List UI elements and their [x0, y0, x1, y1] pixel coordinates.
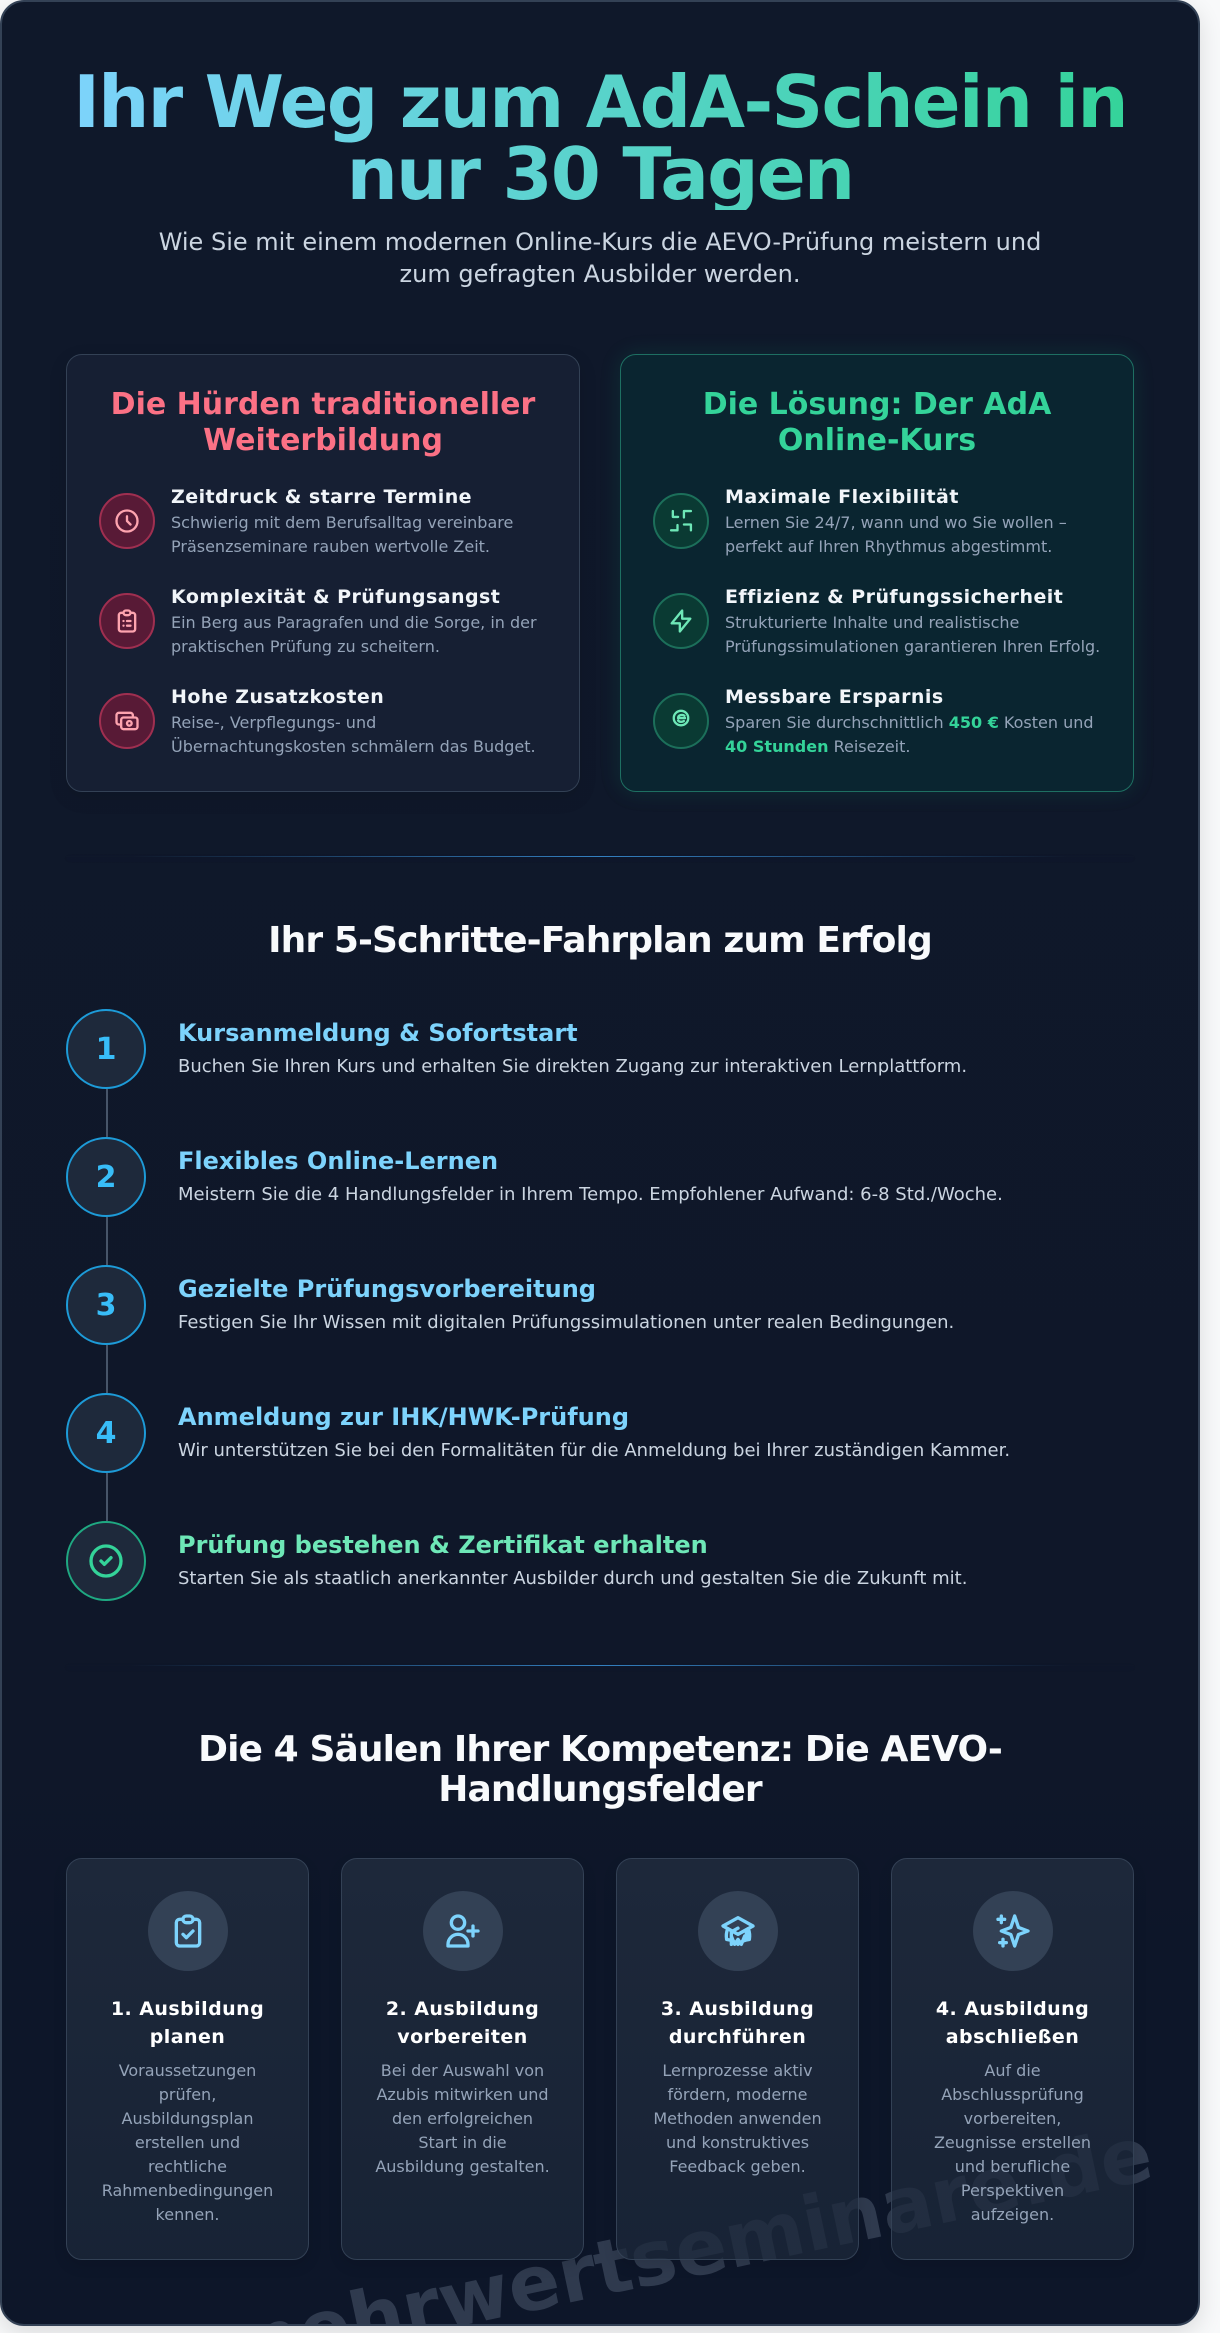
- connector 2: [106, 1217, 108, 1265]
- item: efficiency: [653, 586, 1100, 656]
- subtitle: Wie Sie mit einem modernen Online-Kurs die AEVO-Prüfung meistern und zum gefragten Ausbilder werden.: [159, 228, 1041, 288]
- comparison panels: [66, 352, 1136, 794]
- text: time pressure: Schwierig mit dem Berufsalltag vereinbare Präsenzseminare rauben wertvolle Zeit.: [171, 513, 513, 556]
- step 2: [66, 1137, 1003, 1265]
- step 2 text: Flexibles Online-Lernen: [178, 1147, 498, 1175]
- text: extra costs: Hohe Zusatzkosten: [171, 686, 384, 708]
- heading: competence pillars: Handlungsfelder: [438, 1769, 762, 1810]
- text: savings: Sparen Sie durchschnittlich 450 € Kosten und 40 Stunden Reisezeit.: [725, 713, 1094, 756]
- step 1 text: Kursanmeldung & Sofortstart: [178, 1019, 578, 1047]
- step number 2: [66, 1137, 146, 1217]
- icon: clock: [99, 493, 155, 549]
- item: complexity: [99, 586, 537, 656]
- card 1 title: 1. Ausbildung planen: [111, 1998, 264, 2048]
- text: efficiency: Strukturierte Inhalte und realistische Prüfungssimulationen garantieren Ihren Erfolg.: [725, 613, 1100, 656]
- title: [66, 66, 1134, 210]
- step number 2: 2: [96, 1160, 116, 1194]
- icon: clipboard list: [99, 593, 155, 649]
- card 4 title: 4. Ausbildung abschließen: [936, 1998, 1089, 2048]
- heading: competence pillars: [198, 1729, 1002, 1810]
- title: nur 30 Tagen: [347, 132, 853, 216]
- text: savings: Messbare Ersparnis: [725, 686, 944, 708]
- icon: check circle: [66, 1521, 146, 1601]
- step 4 text: [178, 1403, 1010, 1461]
- step 5 text: Prüfung bestehen & Zertifikat erhalten: [178, 1531, 708, 1559]
- text: complexity: Komplexität & Prüfungsangst: [171, 586, 500, 608]
- heading: hurdles: Die Hürden traditioneller Weiterbildung: [111, 387, 535, 458]
- item: flexibility: [653, 486, 1067, 556]
- step 3 text: [178, 1275, 954, 1333]
- step 4: [66, 1393, 1010, 1521]
- card 1: [66, 1858, 309, 2260]
- step 5: [66, 1521, 967, 1601]
- text: efficiency: Effizienz & Prüfungssicherheit: [725, 586, 1063, 608]
- step 1 text: [178, 1019, 967, 1077]
- pillar cards: [66, 1858, 1134, 2260]
- panel: hurdles: [66, 354, 580, 792]
- timeline: [66, 1009, 1010, 1601]
- panel: solution: [620, 354, 1134, 792]
- card 2 text: Bei der Auswahl von Azubis mitwirken und den erfolgreichen Start in die Ausbildung gestalten.: [375, 2061, 550, 2176]
- item: extra costs: [99, 686, 536, 756]
- icon: add user: [422, 1891, 502, 1971]
- text: time pressure: Zeitdruck & starre Termine: [171, 486, 472, 508]
- card 3 title: 3. Ausbildung durchführen: [661, 1998, 814, 2048]
- item: time pressure: [99, 486, 513, 556]
- icon: contract arrows: [653, 493, 709, 549]
- title: Ihr Weg zum AdA-Schein in: [73, 60, 1127, 144]
- step 2 text: [178, 1147, 1003, 1205]
- text: complexity: Ein Berg aus Paragrafen und die Sorge, in der praktischen Prüfung zu scheitern.: [171, 613, 537, 656]
- card 2 title: 2. Ausbildung vorbereiten: [386, 1998, 539, 2048]
- step 5 text: [178, 1531, 967, 1589]
- card 4: [891, 1858, 1134, 2260]
- step number 1: 1: [96, 1032, 116, 1066]
- icon: sparkles: [972, 1891, 1052, 1971]
- card 3 text: Lernprozesse aktiv fördern, moderne Methoden anwenden und konstruktives Feedback geben.: [653, 2061, 822, 2176]
- connector 1: [106, 1089, 108, 1137]
- step 1: [66, 1009, 967, 1137]
- step 3 text: Festigen Sie Ihr Wissen mit digitalen Prüfungssimulationen unter realen Bedingungen.: [178, 1312, 954, 1333]
- text: time pressure: [171, 486, 513, 556]
- step number 1: [66, 1009, 146, 1089]
- connector 3: [106, 1345, 108, 1393]
- icon: clipboard check: [148, 1891, 228, 1971]
- step number 4: [66, 1393, 146, 1473]
- icon: graduation cap: [698, 1891, 778, 1971]
- connector 4: [106, 1473, 108, 1521]
- text: extra costs: Übernachtungskosten schmälern das Budget.: [171, 737, 536, 756]
- heading: solution: Die Lösung: Der AdA Online-Kurs: [703, 387, 1051, 458]
- heading: roadmap: Ihr 5-Schritte-Fahrplan zum Erfolg: [268, 920, 932, 961]
- icon: cash: [99, 693, 155, 749]
- card 4 text: Auf die Abschlussprüfung vorbereiten, Zeugnisse erstellen und berufliche Perspektiven aufzeigen.: [934, 2061, 1091, 2224]
- icon: coin: [653, 693, 709, 749]
- text: extra costs: [171, 686, 536, 756]
- text: savings: [725, 686, 1094, 756]
- step 3: [66, 1265, 954, 1393]
- step 5 text: Starten Sie als staatlich anerkannter Ausbilder durch und gestalten Sie die Zukunft mit.: [178, 1568, 967, 1589]
- item: savings: [653, 686, 1094, 756]
- text: complexity: [171, 586, 537, 656]
- text: flexibility: [725, 486, 1067, 556]
- card 3: [616, 1858, 859, 2260]
- step 1 text: Buchen Sie Ihren Kurs und erhalten Sie direkten Zugang zur interaktiven Lernplattform.: [178, 1056, 967, 1077]
- step 2 text: Meistern Sie die 4 Handlungsfelder in Ihrem Tempo. Empfohlener Aufwand: 6-8 Std./Woche.: [178, 1184, 1003, 1205]
- step 4 text: Wir unterstützen Sie bei den Formalitäten für die Anmeldung bei Ihrer zuständigen Kammer.: [178, 1440, 1010, 1461]
- step number 3: [66, 1265, 146, 1345]
- text: flexibility: Maximale Flexibilität: [725, 486, 959, 508]
- step number 4: 4: [96, 1416, 116, 1450]
- step 3 text: Gezielte Prüfungsvorbereitung: [178, 1275, 596, 1303]
- card 2: [341, 1858, 584, 2260]
- step number 3: 3: [96, 1288, 116, 1322]
- text: efficiency: [725, 586, 1100, 656]
- heading: competence pillars: Die 4 Säulen Ihrer Kompetenz: Die AEVO-: [198, 1729, 1002, 1770]
- text: extra costs: Reise-, Verpflegungs- und: [171, 713, 376, 732]
- icon: lightning: [653, 593, 709, 649]
- card 1 text: Voraussetzungen prüfen, Ausbildungsplan erstellen und rechtliche Rahmenbedingungen kennen.: [102, 2061, 273, 2224]
- text: flexibility: Lernen Sie 24/7, wann und wo Sie wollen – perfekt auf Ihren Rhythmus abgestimmt.: [725, 513, 1067, 556]
- step 4 text: Anmeldung zur IHK/HWK-Prüfung: [178, 1403, 629, 1431]
